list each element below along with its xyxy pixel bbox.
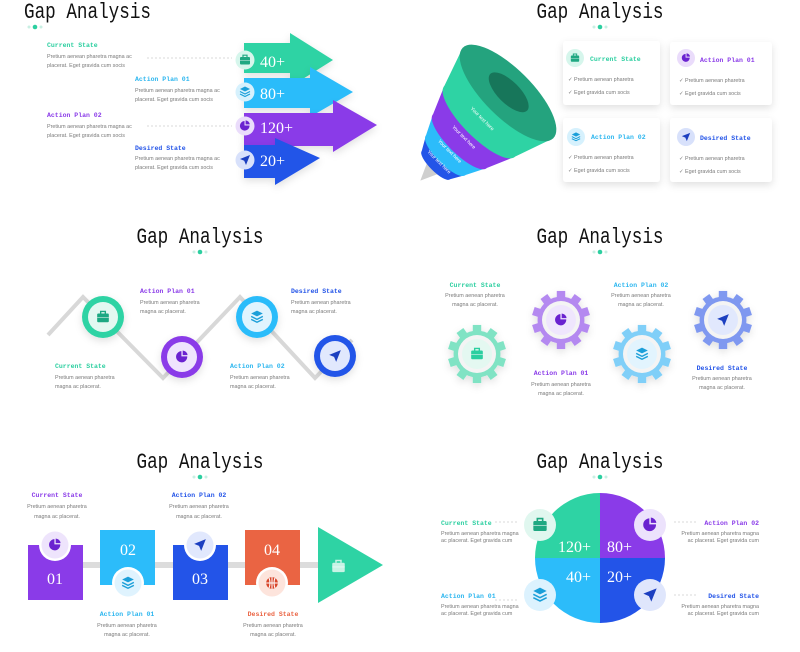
card: action plan 02: Action Plan 02: [591, 134, 646, 141]
text: action plan 02: magna ac placerat.: [230, 384, 276, 390]
circle: desired state: [314, 335, 356, 377]
text: desired state: placerat. Eget gravida cum socis: [135, 165, 213, 171]
text: current state: [441, 520, 519, 544]
text: action plan 01: Pretium aenean pharetra: [531, 382, 591, 388]
text: desired state: magna ac placerat.: [699, 385, 745, 391]
title dots: [592, 250, 608, 254]
text: desired state: magna ac placerat.: [291, 309, 337, 315]
card: action plan 01: Action Plan 01: [700, 57, 755, 64]
title dots: [592, 25, 608, 29]
arrow: action plan 02 120+: [244, 100, 377, 152]
connector bar: [80, 562, 320, 568]
slide 6: pie: [441, 450, 759, 623]
text: desired state: [135, 145, 220, 171]
funnel: [375, 31, 570, 226]
text: action plan 02: [47, 112, 232, 139]
text: action plan 01: ac placerat. Eget gravida cum: [441, 611, 513, 617]
text: action plan 01: magna ac placerat.: [538, 391, 584, 397]
text: desired state: Pretium aenean pharetra magna ac: [135, 156, 220, 162]
text: desired state: Desired State: [135, 145, 186, 152]
text: action plan 01: [441, 593, 519, 617]
text: current state: Pretium aenean pharetra: [55, 375, 115, 381]
text: current state: [27, 492, 87, 520]
text: action plan 01: [135, 76, 220, 103]
title: Gap Analysis: [536, 450, 664, 475]
text: action plan 02: [169, 492, 229, 520]
card: current state: ✓ Pretium aenean pharetra: [568, 77, 634, 83]
text: action plan 02: magna ac placerat.: [176, 514, 222, 520]
text: action plan 01: Pretium aenean pharetra: [140, 300, 200, 306]
text: desired state: Desired State: [708, 593, 759, 600]
text: action plan 01: Action Plan 01: [441, 593, 496, 600]
text: desired state: Pretium aenean pharetra: [692, 376, 752, 382]
slide 3: zigzag: [48, 225, 356, 390]
text: desired state: magna ac placerat.: [250, 632, 296, 638]
text: desired state: [243, 611, 303, 638]
text: desired state: Pretium aenean pharetra: [243, 623, 303, 629]
zigzag line: [48, 297, 352, 378]
text: current state: Current State: [441, 520, 492, 527]
text: action plan 01: placerat. Eget gravida cum socis: [135, 97, 213, 103]
text: action plan 01: [531, 370, 591, 397]
text: action plan 02: Action Plan 02: [614, 282, 668, 289]
gear: current state: [448, 325, 506, 383]
text: action plan 01: [97, 611, 157, 638]
text: desired state: [674, 593, 759, 617]
text: action plan 02: Action Plan 02: [172, 492, 226, 499]
text: current state: Current State: [450, 282, 500, 289]
text: desired state: [692, 365, 752, 391]
text: desired state: [291, 288, 351, 315]
text: action plan 02: Action Plan 02: [47, 112, 102, 119]
funnel: Your text here: [469, 106, 495, 132]
text: current state: magna ac placerat.: [34, 514, 80, 520]
text: desired state: Desired State: [291, 288, 342, 295]
arrow icons and numbers: 80+: [260, 86, 285, 103]
text: desired state: ac placerat. Eget gravida cum: [688, 611, 759, 617]
title: Gap Analysis: [136, 450, 264, 475]
title dots: [192, 250, 208, 254]
text: action plan 02: magna ac placerat.: [618, 302, 664, 308]
step 01: [28, 529, 83, 600]
arrow: desired state 20+: [244, 138, 320, 185]
step 04: [245, 530, 300, 599]
text: current state: Current State: [47, 42, 98, 49]
title: Gap Analysis: [536, 0, 664, 25]
text: desired state: Pretium aenean pharetra: [291, 300, 351, 306]
card: action plan 02: ✓ Pretium aenean pharetra: [568, 155, 634, 161]
text: current state: Pretium aenean pharetra: [27, 504, 87, 510]
card: desired state: ✓ Pretium aenean pharetra: [679, 156, 745, 162]
text: action plan 02: Pretium aenean pharetra magna ac: [47, 124, 132, 130]
text: action plan 01: Pretium aenean pharetra magna ac: [135, 88, 220, 94]
pie chart: 120+: [558, 539, 591, 556]
text: action plan 02: Pretium aenean pharetra: [230, 375, 290, 381]
text: action plan 01: Pretium aenean pharetra: [97, 623, 157, 629]
step 02: 02: [120, 542, 136, 559]
text: current state: Pretium aenean pharetra: [445, 293, 505, 299]
title: Gap Analysis: [136, 225, 264, 250]
step 02: [100, 530, 155, 599]
arrow icons and numbers: 120+: [260, 120, 293, 137]
goal triangle: [318, 527, 383, 603]
title dots: [592, 475, 608, 479]
arrow: current state 40+: [244, 33, 333, 87]
pie chart: 80+: [607, 539, 632, 556]
arrow icons and numbers: 20+: [260, 153, 285, 170]
text: action plan 01: Action Plan 01: [135, 76, 190, 83]
text: action plan 01: Action Plan 01: [140, 288, 195, 295]
arrow icons and numbers: 40+: [260, 54, 285, 71]
text: action plan 02: [674, 520, 759, 544]
text: current state: magna ac placerat.: [452, 302, 498, 308]
text: action plan 01: [140, 288, 200, 315]
card: action plan 01: ✓ Eget gravida cum socis: [679, 91, 741, 97]
title dots: [192, 475, 208, 479]
card: desired state: ✓ Eget gravida cum socis: [679, 169, 741, 175]
circle: action plan 01: [161, 336, 203, 378]
text: action plan 02: placerat. Eget gravida cum socis: [47, 133, 125, 139]
circle: current state: [82, 296, 124, 338]
text: current state: [445, 282, 505, 308]
card: action plan 02: [563, 118, 660, 182]
arrow icons and numbers: [236, 50, 293, 170]
text: action plan 02: ac placerat. Eget gravida cum: [688, 538, 759, 544]
pie chart: [535, 493, 665, 623]
text: action plan 02: Action Plan 02: [704, 520, 759, 527]
arrow: action plan 01 80+: [244, 67, 353, 117]
text: desired state: Pretium aenean pharetra magna: [681, 604, 759, 610]
text: action plan 02: Pretium aenean pharetra: [169, 504, 229, 510]
card: current state: ✓ Eget gravida cum socis: [568, 90, 630, 96]
text: action plan 02: [611, 282, 671, 308]
text: current state: Pretium aenean pharetra magna ac: [47, 54, 132, 60]
text: current state: magna ac placerat.: [55, 384, 101, 390]
text: action plan 02: Action Plan 02: [230, 363, 285, 370]
text: current state: [47, 42, 232, 69]
card: desired state: Desired State: [700, 135, 751, 142]
text: action plan 01: Pretium aenean pharetra magna: [441, 604, 519, 610]
text: action plan 01: magna ac placerat.: [140, 309, 186, 315]
text: desired state: Desired State: [697, 365, 747, 372]
text: action plan 02: Pretium aenean pharetra magna: [681, 531, 759, 537]
title dots: [28, 25, 42, 29]
gear: action plan 01: [532, 291, 590, 349]
pie chart: 20+: [607, 569, 632, 586]
card: current state: [563, 41, 660, 105]
text: current state: Pretium aenean pharetra magna: [441, 531, 519, 537]
slide 4: gears: [445, 225, 752, 397]
step 04: 04: [264, 542, 280, 559]
text: current state: placerat. Eget gravida cum socis: [47, 63, 125, 69]
text: action plan 01: Action Plan 01: [100, 611, 154, 618]
text: action plan 01: Action Plan 01: [534, 370, 588, 377]
slide 5: steps: [27, 450, 383, 638]
text: current state: Current State: [55, 363, 106, 370]
step 01: 01: [47, 571, 63, 588]
title: Gap Analysis: [536, 225, 664, 250]
text: action plan 02: [230, 363, 290, 390]
circle: action plan 02: [236, 296, 278, 338]
text: current state: [55, 363, 115, 390]
pie chart: 40+: [566, 569, 591, 586]
step 03: [173, 529, 228, 600]
step 03: 03: [192, 571, 208, 588]
text: current state: ac placerat. Eget gravida cum: [441, 538, 513, 544]
card: action plan 01: [670, 42, 772, 105]
text: current state: Current State: [32, 492, 82, 499]
text: desired state: Desired State: [248, 611, 298, 618]
text: action plan 02: Pretium aenean pharetra: [611, 293, 671, 299]
gear: action plan 02: [613, 325, 671, 383]
card: action plan 01: ✓ Pretium aenean pharetra: [679, 78, 745, 84]
slide 2: funnel and cards: [375, 0, 772, 226]
slide 1: arrows: [24, 0, 377, 185]
funnel: Your text here: [426, 149, 452, 176]
card: desired state: [670, 118, 772, 182]
funnel: Your text here: [450, 124, 477, 151]
title: Gap Analysis: [24, 0, 151, 25]
card: action plan 02: ✓ Eget gravida cum socis: [568, 168, 630, 174]
card: current state: Current State: [590, 56, 641, 63]
gear: desired state: [694, 291, 752, 349]
funnel: Your text here: [436, 139, 463, 165]
pie icons: [524, 509, 666, 611]
text: action plan 01: magna ac placerat.: [104, 632, 150, 638]
